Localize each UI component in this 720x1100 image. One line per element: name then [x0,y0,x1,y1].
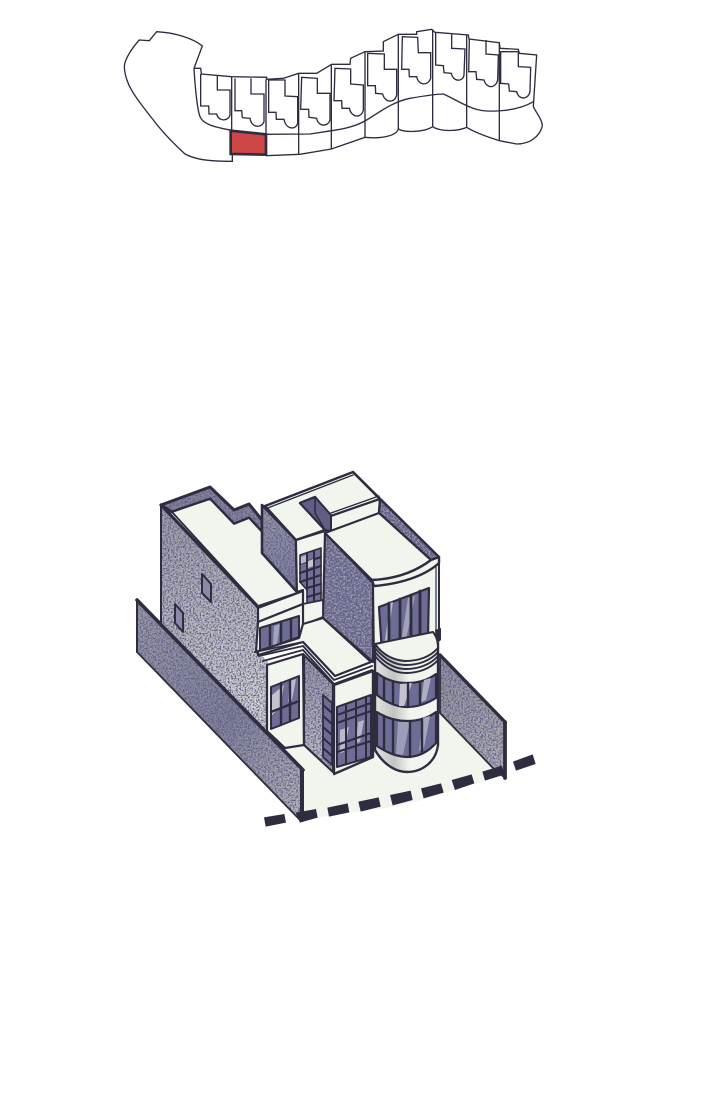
cylinder top [375,632,438,661]
site plan map [124,29,542,161]
dashed property line [264,754,536,827]
right fence [440,655,505,778]
upper roof with light well [265,472,380,540]
front grid window [337,695,371,767]
site outline [124,29,542,161]
purple wall [323,533,373,662]
band window wall [256,604,303,652]
tower left wall [262,505,297,592]
left wall [137,505,268,740]
band window [260,616,299,651]
lower glass band [377,712,436,757]
cylinder body [375,640,438,772]
lower right roof [325,513,431,580]
left roof [172,499,300,606]
right fence edges [440,655,505,778]
light well [300,497,331,531]
upper glass band [377,673,436,707]
upper fascia [331,499,380,532]
left fence [137,600,303,820]
front left white wall [267,654,304,748]
left roof parapet [161,487,262,532]
stepped cornice [255,642,372,688]
road curve [230,94,533,134]
upper curved block [373,560,441,660]
highlighted lot [231,131,266,155]
house footprints [201,32,531,128]
side windows [175,574,211,632]
front white wall [334,671,373,774]
upper curved window [379,588,429,652]
lot dividers [232,29,499,156]
ground plot [285,713,505,820]
tower grid window [300,548,321,606]
isometric building [137,472,505,820]
side slit window [323,695,332,765]
middle roof [258,618,371,676]
right parapet [353,472,439,560]
middle wall [304,655,333,772]
front left window [271,676,299,729]
tower white wall [296,531,325,625]
cylinder rings [375,648,438,673]
front fascia and small white wall [258,591,303,622]
